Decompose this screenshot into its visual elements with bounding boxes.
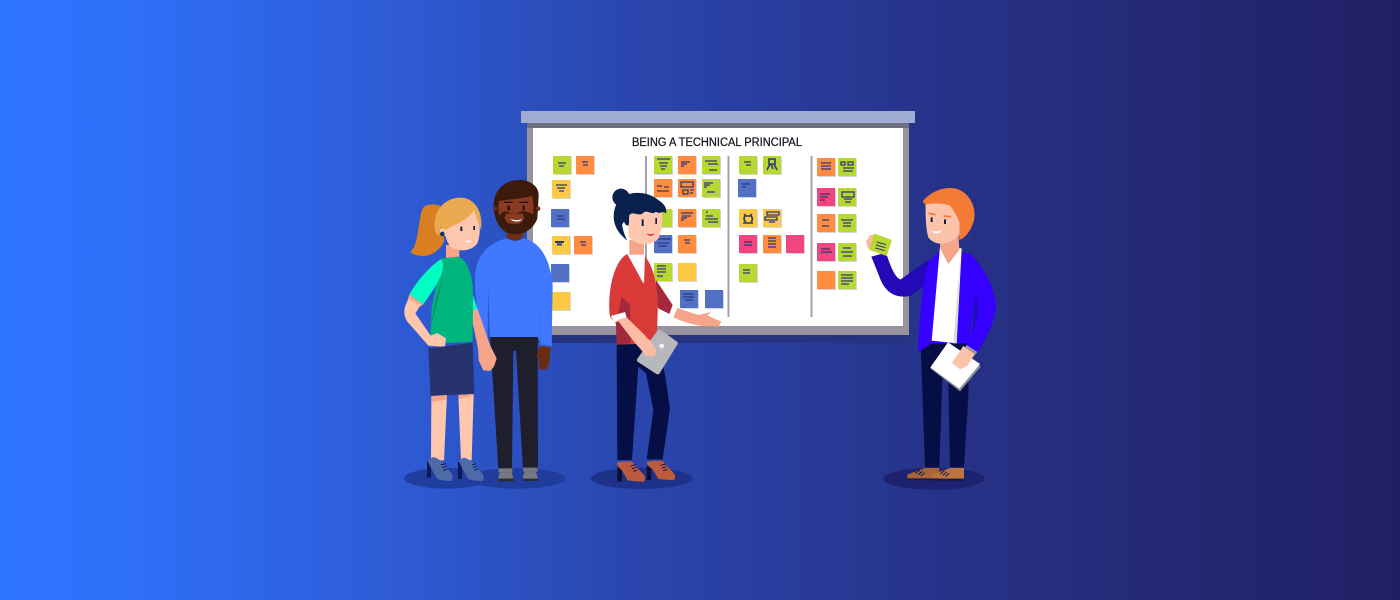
head and hair [923, 188, 975, 264]
ground shadow [883, 468, 985, 490]
shoes [617, 461, 675, 482]
trousers [921, 343, 969, 467]
sticky notes: column 4 [817, 158, 856, 289]
tablet [639, 332, 675, 372]
white shirt [932, 247, 962, 343]
sticky notes: column 1 [551, 156, 594, 310]
figure: man in purple blazer holding sticky note [866, 188, 996, 490]
sticky notes: column 3 [738, 156, 804, 282]
man in blue sweater [475, 180, 553, 481]
holding arm [617, 317, 655, 356]
figure: woman in red sweater with tablet [591, 189, 721, 489]
ground shadow [591, 468, 692, 489]
blazer [918, 250, 996, 353]
sticky notes: column 2 [654, 156, 723, 308]
woman in green top [404, 198, 497, 481]
hand [640, 336, 656, 357]
trousers [617, 343, 670, 460]
hand and cuff [952, 345, 977, 369]
column dividers [645, 156, 812, 317]
held sticky note [866, 233, 892, 256]
outstretched arm [673, 308, 721, 327]
board title: BEING A TECHNICAL PRINCIPAL [632, 137, 803, 149]
clipboard papers [930, 342, 981, 391]
raised arm [871, 253, 930, 297]
figure: woman with ponytail and man in blue sweater [404, 180, 566, 489]
ground shadows [404, 468, 566, 489]
shoes [907, 468, 964, 481]
whiteboard [521, 111, 915, 343]
head and hair [612, 189, 666, 255]
red sweater [609, 248, 673, 345]
